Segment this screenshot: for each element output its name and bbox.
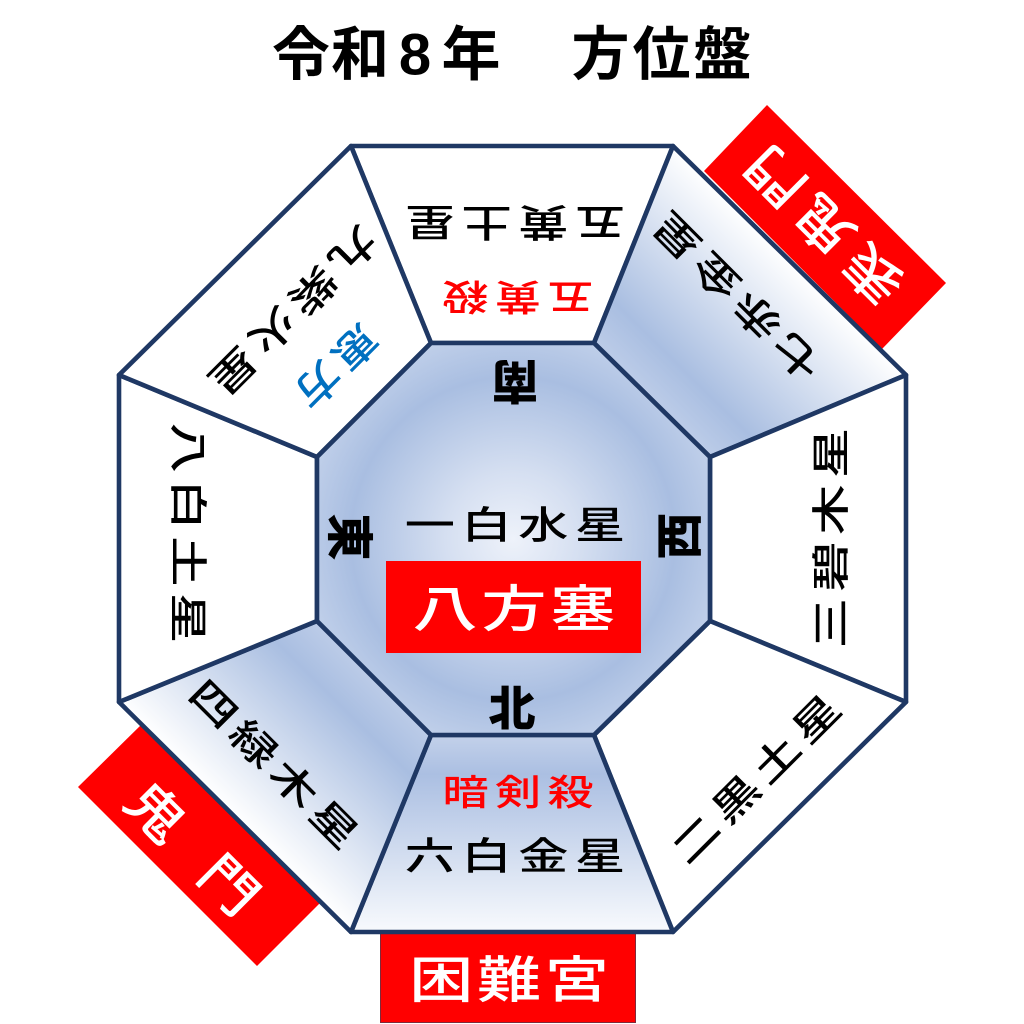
label: 困難宮 bbox=[380, 932, 636, 1022]
text: 一白水星: 一白水星 bbox=[405, 505, 632, 547]
text: 三碧木星: 三碧木星 bbox=[811, 421, 853, 648]
title: 年 bbox=[441, 22, 501, 88]
text: 北: 北 bbox=[488, 682, 536, 736]
sector: south 五黄土星 bbox=[351, 146, 673, 343]
center octagon bbox=[317, 343, 710, 735]
sector: south-east 九紫火星 bbox=[119, 146, 431, 457]
text: 暗剣殺: 暗剣殺 bbox=[443, 773, 600, 813]
text: 二黒土星: 二黒土星 bbox=[664, 683, 854, 873]
sector: east 八白土星 bbox=[119, 375, 317, 702]
text: 九紫火星: 九紫火星 bbox=[195, 217, 385, 407]
sector: south-west 七赤金星 bbox=[594, 146, 906, 457]
text: 五黄殺: 五黄殺 bbox=[436, 276, 593, 316]
title: 令和 bbox=[272, 22, 390, 88]
text: 南: 南 bbox=[492, 354, 538, 408]
sector: west 三碧木星 bbox=[710, 375, 906, 702]
sector: north 六白金星 bbox=[351, 735, 673, 932]
title: 8 bbox=[399, 22, 431, 88]
text: 八白土星: 八白土星 bbox=[166, 423, 208, 650]
text: 西: 西 bbox=[654, 512, 706, 560]
sector: north-east 四緑木星 bbox=[119, 621, 431, 932]
label: 八方塞: 八方塞 bbox=[413, 582, 619, 638]
text: 四緑木星: 四緑木星 bbox=[180, 672, 370, 862]
text: 恵方: 恵方 bbox=[280, 314, 386, 420]
octagon board bbox=[119, 146, 906, 932]
title bbox=[272, 22, 755, 88]
label: 鬼門: 鬼 門 bbox=[114, 771, 267, 924]
label: 表鬼門 bbox=[704, 105, 946, 349]
text: 六白金星: 六白金星 bbox=[405, 836, 632, 878]
sector: north-west 二黒土星 bbox=[594, 621, 906, 932]
label: 鬼門 bbox=[78, 724, 320, 966]
text: 七赤金星: 七赤金星 bbox=[641, 198, 831, 388]
text: 五黄土星: 五黄土星 bbox=[398, 200, 625, 242]
text: 東: 東 bbox=[322, 514, 376, 560]
label: 表鬼門: 表鬼門 bbox=[728, 128, 916, 316]
label: 八方塞 bbox=[386, 561, 641, 653]
title: 方位盤 bbox=[571, 22, 755, 88]
label: 困難宮: 困難宮 bbox=[409, 953, 613, 1009]
